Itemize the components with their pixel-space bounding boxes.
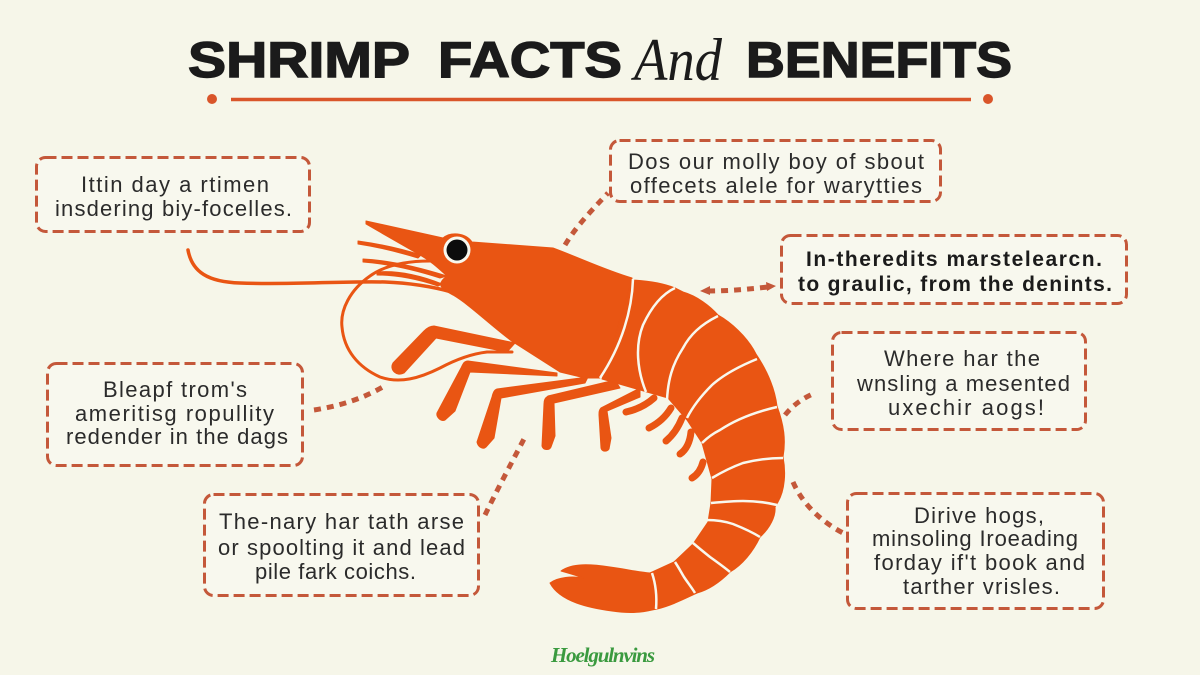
- callout: middle right: wnsling a mesented: [856, 371, 1070, 396]
- connector: lower right box: [793, 482, 843, 533]
- callout: top left: [36, 158, 310, 232]
- connector: lower left box: [485, 437, 525, 515]
- abdomen and tail: [550, 279, 785, 612]
- callout: middle left: Bleapf trom's: [103, 377, 247, 402]
- title rule: [207, 94, 993, 104]
- antennae: [188, 241, 512, 380]
- callout: top centre: Dos our molly boy of sbout: [628, 149, 924, 174]
- callout: middle left: ameritisg ropullity: [75, 401, 274, 426]
- title: [188, 27, 1012, 93]
- callout: middle left: [48, 364, 302, 466]
- callout: right, bold: In-theredits marstelearcn.: [806, 248, 1102, 271]
- callout: lower right: minsoling Iroeading: [872, 526, 1078, 551]
- callout: middle right: uxechir aogs!: [888, 395, 1044, 420]
- connector: left box: [314, 385, 386, 410]
- callout: lower left: [204, 494, 478, 596]
- swimmerets: [626, 398, 703, 478]
- connector: arrow to box 3: [700, 282, 776, 295]
- title: BENEFITS: [746, 32, 1012, 88]
- connector: right box: [785, 393, 815, 415]
- callout: lower left: pile fark coichs.: [255, 559, 416, 584]
- shrimp illustration: [188, 221, 785, 612]
- walking legs: [392, 326, 640, 451]
- callout: right, bold: [782, 236, 1126, 304]
- segment seams: [600, 279, 783, 609]
- callout: lower right: tarther vrisles.: [903, 574, 1060, 599]
- callout: top centre: [610, 140, 940, 202]
- connector: top box: [565, 193, 608, 245]
- callout: lower right: [848, 494, 1104, 608]
- footer brand: Hoelgulnvins: [550, 643, 655, 667]
- title: SHRIMP: [188, 32, 410, 88]
- callout: middle right: [832, 332, 1086, 430]
- callout: middle left: redender in the dags: [66, 424, 288, 449]
- callout: lower right: forday if't book and: [874, 550, 1085, 575]
- callout: lower right: Dirive hogs,: [914, 503, 1044, 528]
- eye: [444, 236, 470, 264]
- callout: lower left: or spoolting it and lead: [218, 535, 465, 560]
- carapace: [366, 221, 632, 378]
- title: And: [630, 27, 723, 93]
- callout: middle right: Where har the: [884, 346, 1040, 371]
- callout: top left: insdering biy-focelles.: [55, 196, 292, 221]
- title: FACTS: [438, 32, 622, 88]
- callout: top left: Ittin day a rtimen: [81, 172, 269, 197]
- callout: right, bold: to graulic, from the denints.: [798, 273, 1112, 296]
- callout: lower left: The-nary har tath arse: [219, 509, 464, 534]
- callout: top centre: offecets alele for warytties: [630, 173, 922, 198]
